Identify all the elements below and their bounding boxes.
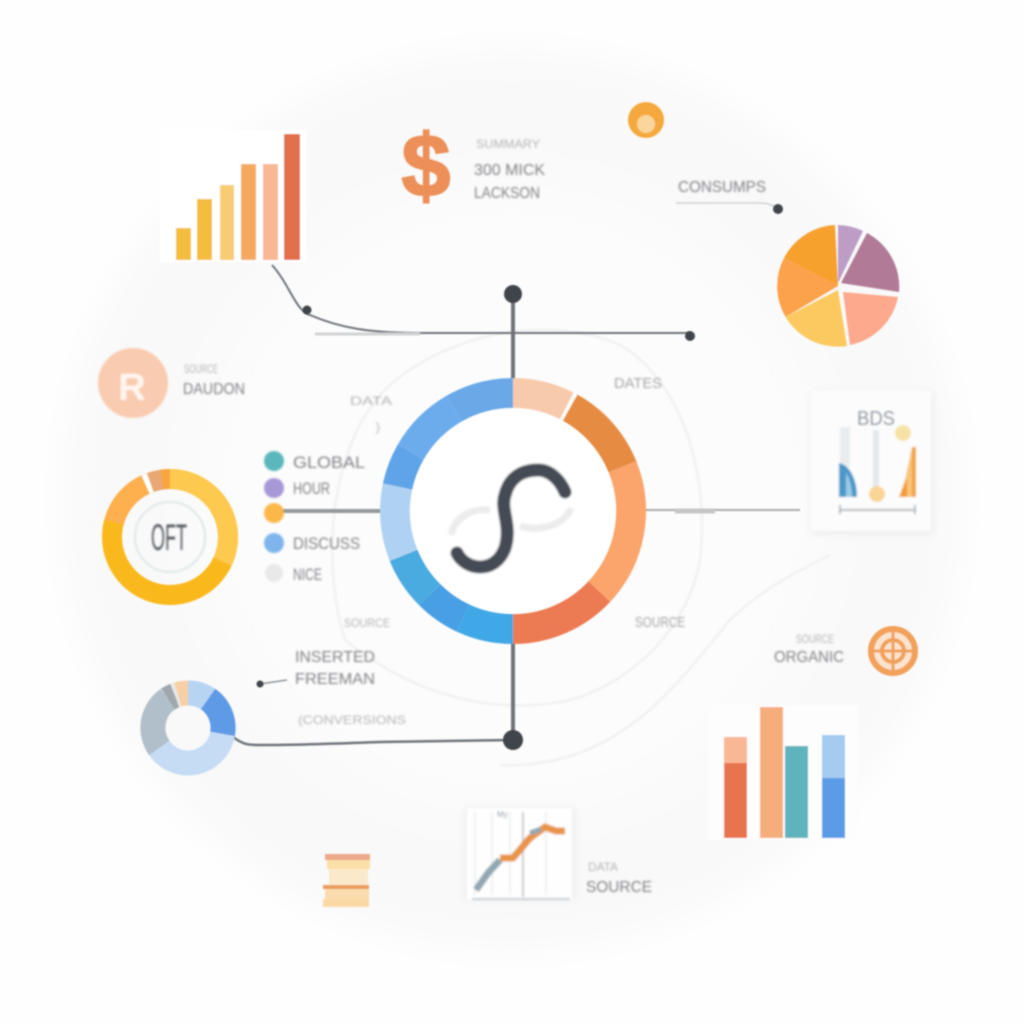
ring labels: SOURCE (344, 616, 390, 630)
panel: line chart bottom (465, 808, 575, 900)
small donut bottom left (153, 693, 223, 763)
ring labels: } (376, 420, 380, 434)
connector nodes (256, 204, 783, 750)
legend: GLOBAL (293, 453, 365, 472)
panel: line chart bottom: My (497, 810, 508, 819)
panel: stacked bar chart bottom right (708, 705, 858, 840)
legend (264, 451, 365, 584)
text: OFT (151, 517, 187, 558)
text block: R caption (183, 362, 245, 398)
central logo: S symbol (411, 409, 615, 613)
text block: globe caption: SOURCE (796, 632, 834, 646)
text block: line chart caption: DATA (588, 860, 618, 874)
faint orbit lines (332, 330, 830, 765)
ring labels (344, 375, 685, 631)
text block: bottom left caption: (CONVERSIONS (298, 713, 406, 727)
text block: dollar caption: LACKSON (474, 185, 540, 202)
text block: dollar caption: SUMMARY (476, 137, 540, 151)
connector lines (233, 203, 800, 745)
text block: globe caption: ORGANIC (774, 649, 844, 666)
legend: DISCUSS (293, 534, 360, 553)
text block: globe caption (774, 632, 844, 666)
icon: stacked coins (323, 854, 370, 907)
text block: R caption: DAUDON (183, 381, 245, 398)
text block: R caption: SOURCE (184, 362, 218, 376)
pie chart (777, 225, 899, 347)
donut gauge left (112, 479, 228, 595)
text block: bottom left caption (295, 649, 406, 727)
ring labels: DATA (350, 394, 392, 408)
text block: line chart caption: SOURCE (586, 879, 652, 896)
panel: small chart right (811, 390, 933, 534)
legend: HOUR (293, 479, 330, 498)
icon: sun badge (628, 102, 664, 138)
ring labels: DATES (614, 375, 662, 392)
ring labels: SOURCE (635, 614, 685, 631)
legend: NICE (293, 565, 322, 584)
text block: line chart caption (586, 860, 652, 896)
panel: small chart right: BDS (857, 408, 895, 430)
text block: dollar caption (474, 137, 545, 202)
label: consumps: CONSUMPS (678, 179, 766, 196)
panel: bar chart top left (160, 130, 306, 262)
text block: bottom left caption: INSERTED (295, 649, 375, 666)
text block: bottom left caption: FREEMAN (295, 671, 375, 688)
icon: dollar sign: $ (402, 116, 450, 215)
central ring chart (395, 393, 631, 629)
icon: letter R badge: R (118, 367, 146, 409)
text block: dollar caption: 300 MICK (474, 162, 545, 179)
icon: letter R badge (98, 348, 168, 418)
icon: orange globe (871, 629, 915, 673)
